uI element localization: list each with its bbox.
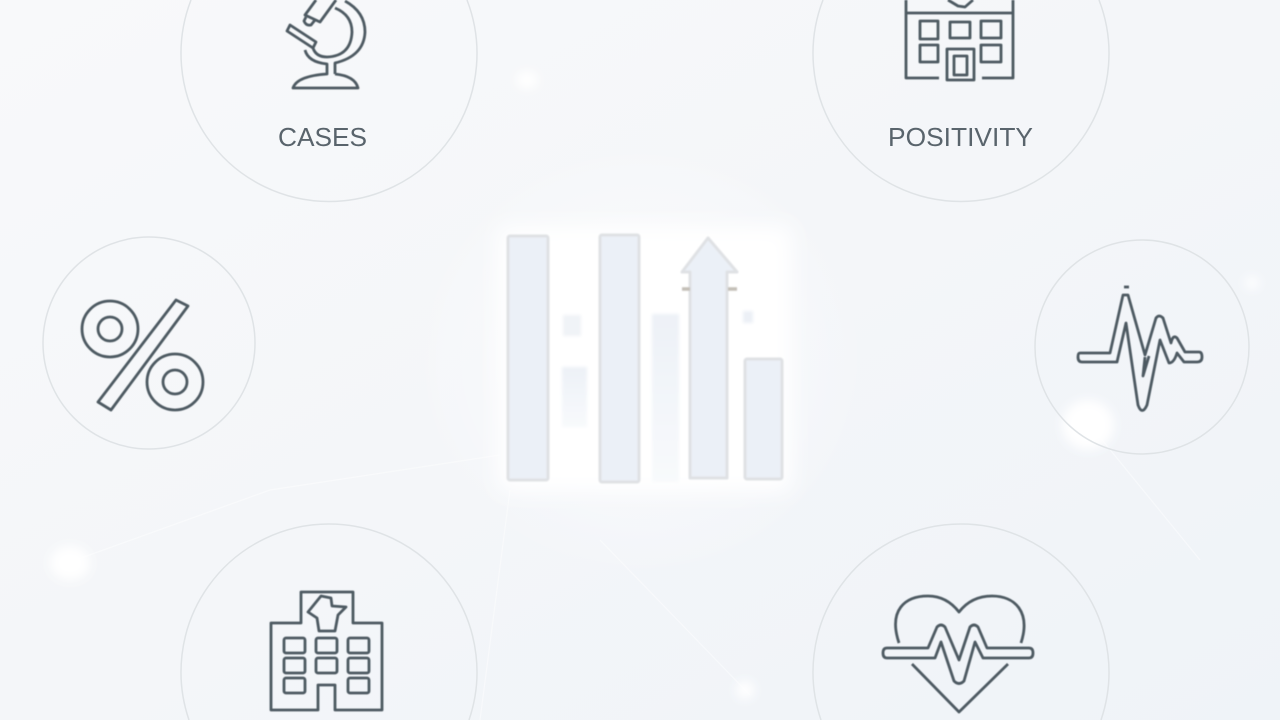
icon: microscope [287,0,365,88]
label: cases: CASES [278,122,367,152]
chart: central bars with arrow [498,226,792,492]
bar 2 [600,235,639,482]
bar 1 [508,236,548,480]
percentage ring [43,237,255,449]
positivity ring [813,0,1109,201]
icon: hospital building [271,592,382,710]
arrow bar [682,238,737,478]
bar 4 [745,359,782,479]
icon: heart with pulse [883,596,1033,712]
panel: percentage [43,237,255,449]
arrow side ticks [682,287,737,291]
icon: pulse wave [1078,287,1202,410]
heart rate ring [813,524,1109,720]
panel: pulse [1035,240,1249,454]
label: positivity: POSITIVITY [888,122,1033,152]
panel: positivity [813,0,1109,201]
hospital ring [181,524,477,720]
panel: heart rate [813,524,1109,720]
cases ring [181,0,477,201]
bars [508,235,782,482]
icon: percent sign [82,300,203,410]
pulse ring [1035,240,1249,454]
chart glow [498,226,792,492]
panel: cases [181,0,477,201]
panel: hospital [181,524,477,720]
faded background bars [562,311,753,482]
icon: clinic building [906,0,1013,80]
